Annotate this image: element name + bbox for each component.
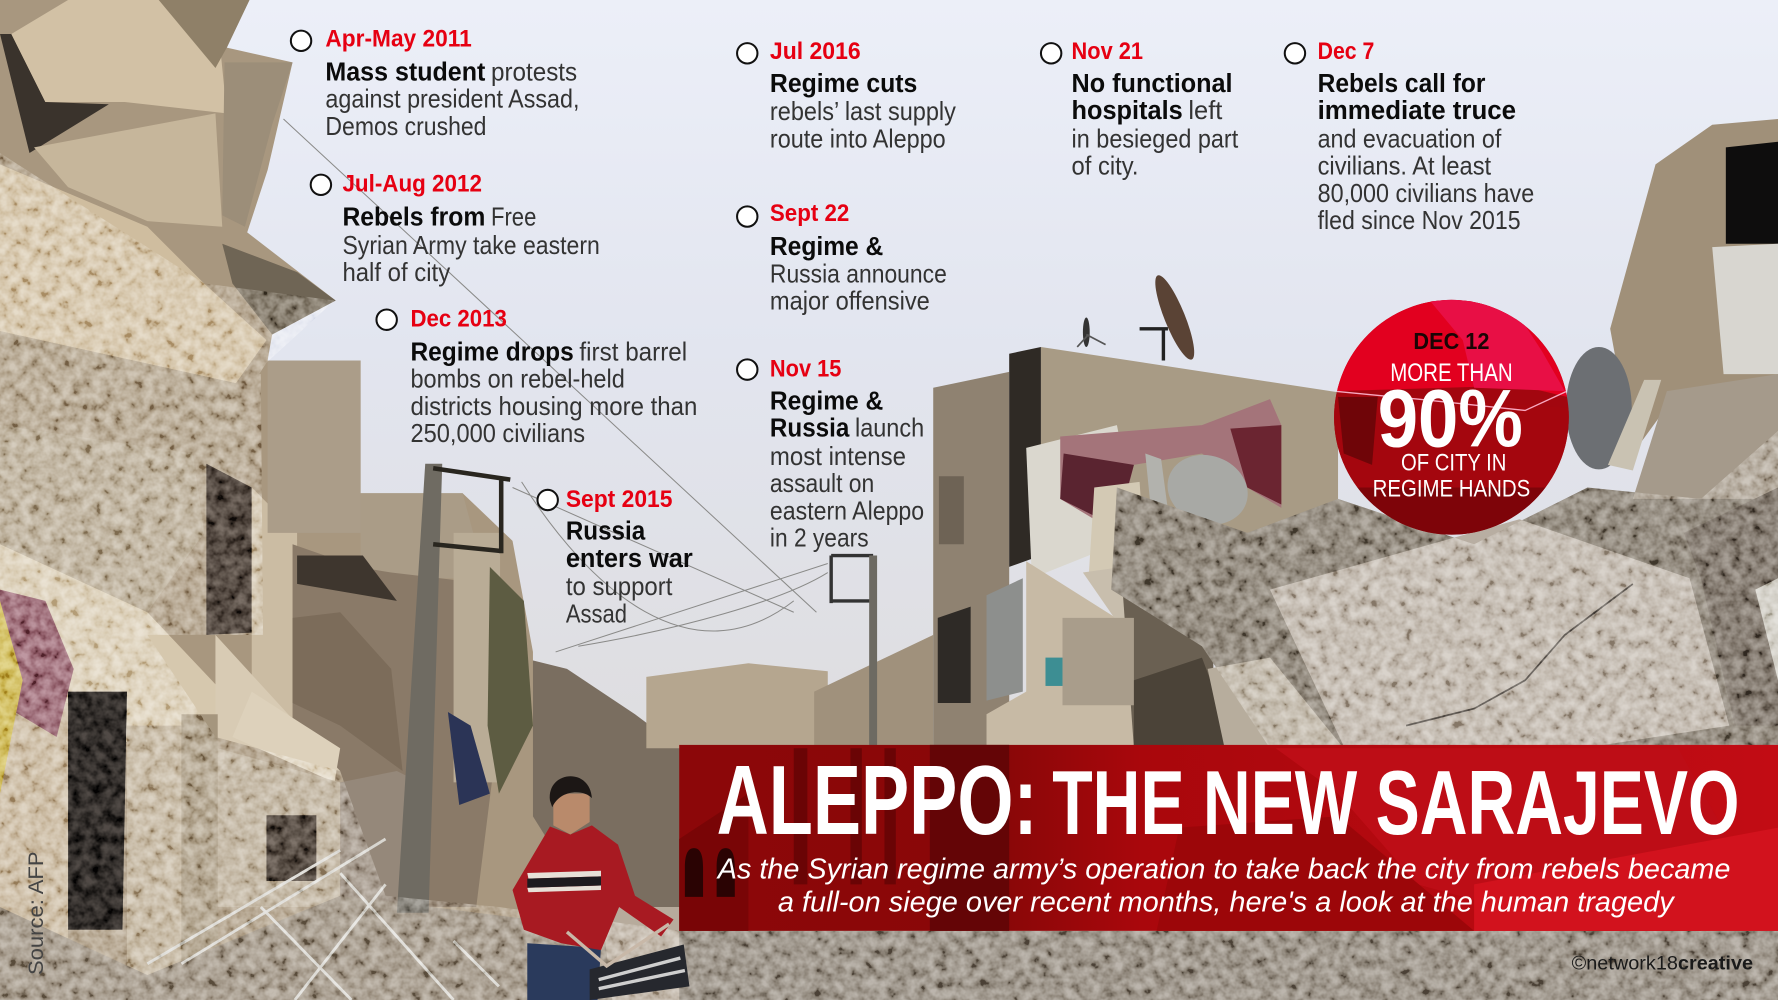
event: Nov 21 (1041, 38, 1238, 181)
event: Apr-May 2011: Demos crushed (325, 113, 486, 141)
event: Sept 22 (737, 200, 947, 316)
event: Jul-Aug 2012: Syrian Army take eastern (342, 232, 600, 260)
timeline (291, 25, 1534, 628)
event: Nov 15: Regime & (770, 385, 883, 415)
event: Sept 2015: Assad (566, 600, 627, 628)
event: Dec 2013: districts housing more than (410, 393, 697, 421)
event: Sept 22: Regime & (770, 231, 883, 261)
event: Dec 2013: 250,000 civilians (410, 420, 585, 448)
event: Apr-May 2011 (291, 25, 579, 141)
callout: Dec 12 red circle: DEC 12 (1413, 328, 1489, 354)
event: Dec 2013: bombs on rebel-held (410, 366, 625, 394)
event: Nov 15: assault on (770, 470, 874, 498)
event: Nov 15: most intense (770, 443, 906, 471)
event: Jul-Aug 2012: Jul-Aug 2012 (342, 171, 482, 198)
event: Apr-May 2011: Mass student (325, 57, 486, 86)
event: Dec 7: Rebels call for (1318, 68, 1485, 98)
event: Nov 21: No functional (1072, 68, 1233, 98)
brand credit: ©network18creative (1572, 953, 1753, 974)
event: Sept 22: Russia announce (770, 260, 947, 288)
event: Sept 2015: Sept 2015 (566, 486, 672, 513)
source credit: Source: AFP (24, 851, 48, 975)
event: Nov 21: of city. (1072, 153, 1138, 181)
heading (717, 745, 1739, 855)
event: Nov 15 (737, 355, 924, 552)
event: Nov 15: in 2 years (770, 524, 869, 552)
event: Nov 15: eastern Aleppo (770, 497, 924, 525)
event: Dec 7: 80,000 civilians have (1318, 180, 1534, 208)
event: Sept 2015 (537, 486, 693, 628)
event: Dec 7 (1285, 38, 1534, 235)
event: Jul 2016: rebels’ last supply (770, 98, 956, 126)
callout: Dec 12 red circle: MORE THAN (1390, 359, 1513, 387)
event: Sept 22: major offensive (770, 288, 930, 316)
title banner (679, 745, 1778, 931)
event: Nov 15: Nov 15 (770, 355, 841, 382)
callout: Dec 12 red circle (1334, 300, 1569, 535)
event: Jul 2016: Regime cuts (770, 68, 917, 98)
event: Jul 2016: Jul 2016 (770, 38, 861, 65)
callout: Dec 12 red circle: OF CITY IN (1401, 450, 1506, 477)
boy with cart (513, 776, 689, 1000)
event: Nov 21: in besieged part (1072, 125, 1238, 153)
event: Dec 2013: Dec 2013 (410, 306, 507, 333)
event: Dec 7: immediate truce (1318, 95, 1516, 125)
heading: ALEPPO: (717, 745, 1038, 855)
event: Jul-Aug 2012: Rebels from (342, 202, 485, 232)
event: Nov 15: launch (855, 415, 924, 443)
subheading: a full-on siege over recent months, here's a look at the human tragedy (778, 887, 1675, 919)
event: Sept 2015: Russia (566, 516, 646, 546)
event: Nov 21: left (1188, 97, 1222, 125)
event: Dec 7: civilians. At least (1318, 153, 1491, 181)
event: Sept 2015: enters war (566, 543, 693, 573)
event: Dec 2013: first barrel (579, 339, 687, 367)
event: Jul 2016 (737, 38, 956, 153)
event: Jul 2016: route into Aleppo (770, 125, 946, 153)
event: Dec 2013 (376, 306, 697, 448)
event: Apr-May 2011: protests (491, 59, 577, 86)
event: Sept 2015: to support (566, 573, 672, 601)
event: Dec 7: Dec 7 (1318, 38, 1374, 65)
event: Sept 22: Sept 22 (770, 200, 849, 227)
event: Nov 21: hospitals (1072, 95, 1183, 125)
event: Dec 2013: Regime drops (410, 337, 574, 367)
event: Apr-May 2011: against president Assad, (325, 86, 579, 114)
event: Apr-May 2011: Apr-May 2011 (325, 25, 472, 52)
event: Nov 21: Nov 21 (1072, 38, 1143, 65)
event: Jul-Aug 2012 (311, 171, 600, 287)
event: Nov 15: Russia (770, 413, 850, 443)
event: Dec 7: fled since Nov 2015 (1318, 207, 1521, 235)
callout: Dec 12 red circle: 90% (1378, 374, 1523, 465)
subheading: As the Syrian regime army’s operation to take back the city from rebels became (716, 854, 1730, 886)
subheading (716, 854, 1730, 919)
event: Dec 7: and evacuation of (1318, 125, 1502, 153)
callout: Dec 12 red circle: REGIME HANDS (1373, 476, 1530, 503)
event: Jul-Aug 2012: half of city (342, 259, 450, 287)
event: Jul-Aug 2012: Free (491, 204, 536, 232)
